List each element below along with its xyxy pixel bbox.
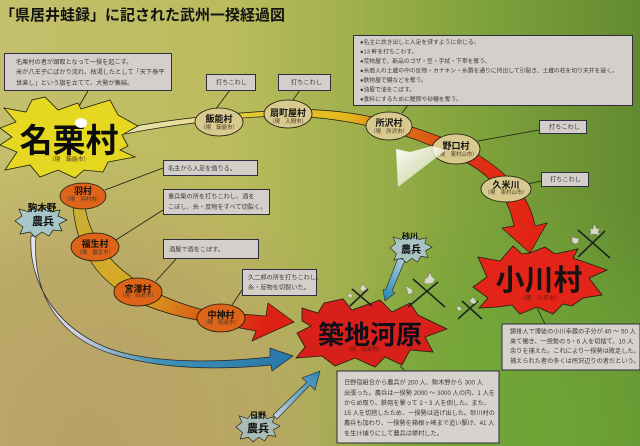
node: Miyazawa: （現 昭島市） — [119, 291, 157, 299]
icon: crossed swords right of Tsukiji-gawara — [406, 272, 445, 307]
node: Hamura — [60, 183, 106, 209]
node: Ogimachiya — [264, 100, 312, 128]
note: Nakagami: 久二郎の所を打ちこわし、 — [248, 274, 322, 282]
icon: crossed swords left of Ogawa — [457, 297, 482, 319]
burst sublabel: Ogawa: （現 小平市） — [520, 294, 560, 302]
note: smashing 3 — [540, 120, 586, 134]
note: smashing 2 — [278, 74, 330, 90]
note: Fussa — [164, 190, 270, 214]
note: Naguri uprising — [4, 54, 172, 90]
note: Ogawa battle — [502, 324, 640, 370]
note: Tokorozawa actions: ●食料にするために鰹節や砂糖を奪う。 — [360, 95, 462, 103]
node: Nakagami — [197, 304, 245, 332]
arrow: Hino farmer militia — [273, 371, 320, 419]
note: smashing 1 — [206, 74, 256, 90]
note: Naguri uprising: 米が八王子にばかり流れ、枯渇したとして「天下泰平 — [16, 68, 164, 76]
note: smashing 4: 打ちこわし — [550, 176, 581, 184]
icon: crossed swords near Ogawa — [572, 224, 610, 258]
burst label: Ogawa: 小川村 — [495, 264, 583, 297]
node: Hanno: （現 飯能市） — [200, 123, 238, 131]
node: Hanno — [195, 108, 243, 136]
note: Ogawa battle: 来て働き、一揆勢の 5・6 人を切捨て、10 人 — [510, 338, 634, 346]
note: smashing 1: 打ちこわし — [216, 78, 247, 86]
burst: Naguri village — [0, 97, 138, 178]
note: Tsukiji-gawara battle: 15 人を切捨したため、一揆勢は逃げ出した。砂川村の — [344, 409, 495, 417]
icon: crossed swords above Tsukiji-gawara — [348, 284, 372, 306]
burst: Sunagawa militia: 砂川 — [402, 231, 418, 241]
note: Tokorozawa actions: ●糸商人の土蔵の中の反物・カナキン・糸類を通りに持出して引裂き、土蔵の柱を切り天井を破く。 — [360, 66, 618, 74]
arrow: Komakino farmer militia — [31, 236, 293, 371]
node: Miyazawa: 宮澤村 — [124, 283, 152, 294]
note: Tsukiji-gawara battle: からめ取り、鉄砲を撃って 2・3 人を倒した。また、 — [344, 399, 490, 407]
burst label: Naguri: 名栗村 — [20, 122, 118, 159]
note: Tsukiji-gawara battle: 日野宿組合から農兵が 200 人、駒木野から 300 人 — [344, 378, 484, 386]
burst: Sunagawa militia — [390, 231, 432, 263]
node: Ogimachiya: 扇町屋村 — [270, 107, 306, 118]
node: Noguchi: 野口村 — [442, 140, 470, 151]
burst: Hino militia: 農兵 — [247, 421, 269, 435]
note: Naguri uprising: 名栗村の者が頭取となって一揆を起こす。 — [16, 58, 132, 66]
note: Tsukiji-gawara battle: 農兵も加わり、一揆勢を箱根ヶ崎まで追い駆け、41 人 — [344, 419, 495, 427]
node: Tokorozawa — [366, 112, 412, 140]
note: Ogawa battle: 余りを捕えた。これにより一揆勢は敗走した。 — [510, 347, 640, 355]
note: Tokorozawa actions — [354, 36, 632, 106]
node: Hamura: 羽村 — [74, 185, 92, 196]
node: Hanno: 飯能村 — [205, 113, 233, 124]
note: Tokorozawa actions: ●13 軒を打ちこわす。 — [360, 48, 417, 56]
note: smashing 3: 打ちこわし — [549, 123, 580, 131]
burst sublabel: Naguri: （現 飯能市） — [49, 155, 89, 163]
burst: Sunagawa militia: 農兵 — [401, 243, 421, 256]
note: Fussa: こぼし、糸・反物をすべて切裂く。 — [168, 203, 266, 211]
burst: Ogawa village — [473, 246, 607, 314]
node: Kumegawa — [481, 176, 531, 202]
note: Tokorozawa actions: ●鉄物屋で鍵などを奪う。 — [360, 76, 427, 84]
note: Naguri uprising: 世直し」という旗を立てて、大勢が集結。 — [16, 79, 133, 87]
node: Tokorozawa: （現 所沢市） — [370, 127, 408, 135]
note: smashing 4 — [542, 172, 588, 186]
node: Nakagami: 中神村 — [207, 309, 235, 320]
node: Kumegawa: （現 東村山市） — [484, 188, 528, 196]
burst: Komakino militia: 農兵 — [32, 214, 54, 228]
photo glare on glass — [75, 118, 446, 187]
note: smashing 2: 打ちこわし — [291, 78, 322, 86]
note: Tsukiji-gawara battle: を生け捕りにして農兵は帰村した。 — [344, 430, 443, 438]
note: Tsukiji-gawara battle: 出張った。農兵は一揆勢 2000 ～ 3000 人の内、1 人を — [344, 389, 495, 397]
note: Nakagami: 糸・反物を切裂いた。 — [248, 284, 310, 292]
note: Nakagami — [242, 270, 322, 296]
note: Hamura: 名主から人足を借りる。 — [168, 164, 236, 172]
node: Noguchi: （現 東村山市） — [434, 150, 478, 158]
node: Miyazawa — [114, 278, 162, 306]
note: Tokorozawa actions: ●油屋で油をこぼす。 — [360, 86, 415, 94]
node: Noguchi — [432, 134, 480, 164]
node: Hamura: （現 羽村市） — [64, 195, 102, 203]
title: 「県居井蛙録」に記された武州一揆経過図 — [0, 6, 285, 24]
burst: Hino militia: 日野 — [250, 411, 266, 420]
node: Ogimachiya: （現 入間市） — [269, 117, 307, 125]
note: Miyazawa — [164, 240, 258, 258]
burst sublabel: Tsukiji-gawara: （現 昭島市） — [345, 345, 383, 353]
note: Miyazawa: 酒屋で酒をこぼす。 — [169, 246, 224, 254]
note: Hamura — [164, 160, 258, 176]
node: Tokorozawa: 所沢村 — [375, 117, 403, 128]
note: Tokorozawa actions: ●名主に炊き出しと人足を貸すように命じる。 — [360, 38, 479, 46]
note: Ogawa battle: 捕えられた者の多くは所沢辺りの者だという。 — [510, 357, 640, 365]
burst: Hino militia — [236, 411, 280, 442]
burst: Komakino militia — [15, 202, 67, 237]
node: Fussa: （現 福生市） — [76, 248, 114, 256]
route arrow: Naguri to Ogawa — [125, 110, 547, 253]
arrow: Sunagawa farmer militia — [383, 258, 405, 301]
burst: Tsukiji-gawara — [296, 299, 447, 367]
note: Fussa: 重兵衛の所を打ちこわし、酒を — [168, 192, 255, 200]
connector lines from notes to places — [78, 90, 545, 371]
node: Nakagami: （現 昭島市） — [202, 318, 240, 326]
burst: Komakino militia: 駒木野 — [28, 202, 57, 214]
note: Tokorozawa actions: ●荒物屋で、新品のゴザ・笠・手拭・下帯を奪う。 — [360, 57, 490, 65]
route arrow: Hamura to Tsukiji-gawara — [73, 205, 294, 341]
node: Fussa — [71, 233, 119, 261]
node: Fussa: 福生村 — [81, 238, 109, 249]
burst label: Tsukiji-gawara: 築地河原 — [318, 320, 422, 350]
note: Tsukiji-gawara battle — [337, 371, 499, 443]
note: Ogawa battle: 鋳掛人で博徒の小川幸蔵の子分が 40 ～ 50 人 — [510, 328, 637, 336]
node: Kumegawa: 久米川 — [492, 179, 520, 190]
